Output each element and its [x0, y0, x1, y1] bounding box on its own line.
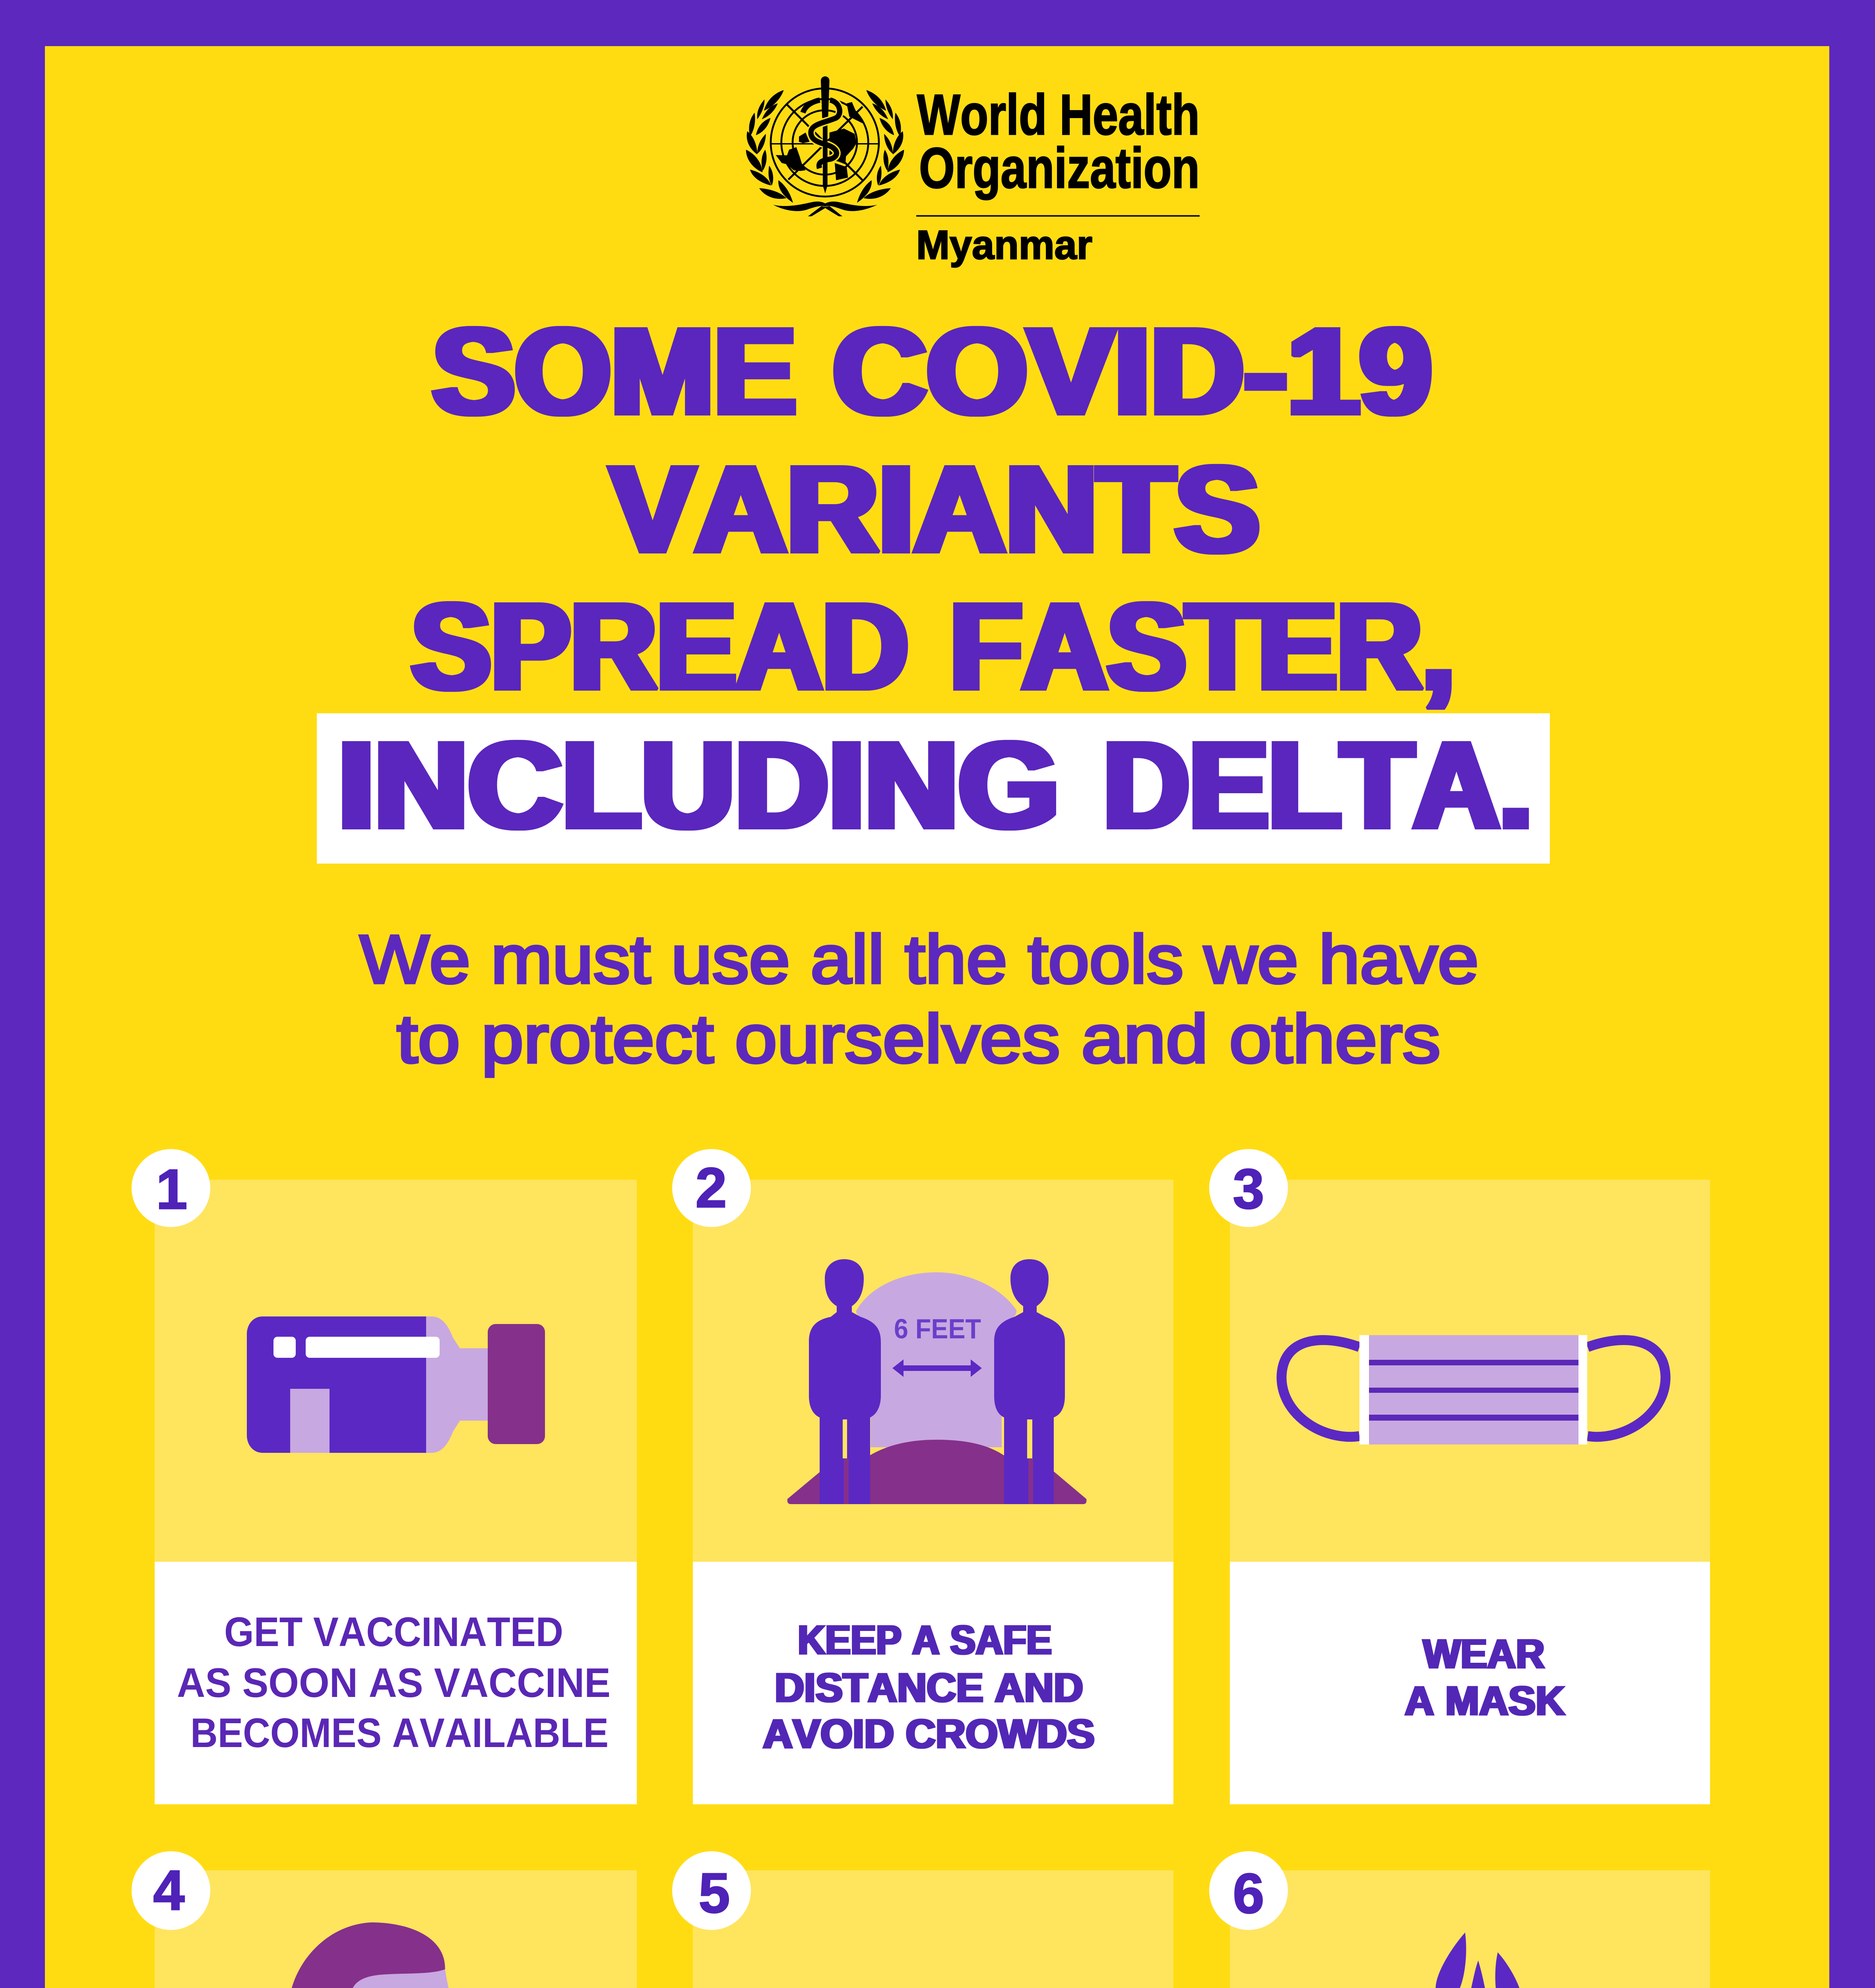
- icon: WHO emblem: [746, 76, 904, 216]
- subtitle: [360, 921, 1479, 1077]
- logo country name: Myanmar: [916, 222, 1092, 268]
- number badge 4: 4: [153, 1859, 185, 1922]
- illustration background: [693, 1180, 1173, 1562]
- distance label: 6 FEET: [894, 1313, 981, 1344]
- title line 3: [411, 577, 1455, 715]
- caption 1: [177, 1609, 611, 1756]
- caption background: [1230, 1562, 1710, 1804]
- title line 1: SOME: [432, 302, 796, 440]
- panel 4: cough or sneeze into elbow: [132, 1851, 637, 1988]
- logo rule: [916, 215, 1200, 217]
- caption background: [693, 1562, 1173, 1804]
- logo: World Health Organization Myanmar: [746, 76, 1200, 268]
- panel 3: wear a mask: [1209, 1149, 1710, 1804]
- number badge 3: [1209, 1149, 1288, 1227]
- caption 2: AVOID CROWDS: [763, 1711, 1095, 1757]
- panel 2: keep a safe distance: [672, 1149, 1173, 1804]
- number badge 5: [672, 1851, 751, 1930]
- number badge 6: 6: [1233, 1862, 1264, 1925]
- number badge 5: 5: [699, 1862, 730, 1925]
- title line 4: INCLUDING: [338, 716, 1059, 854]
- double arrow: [892, 1359, 982, 1377]
- illustration background: [155, 1180, 637, 1562]
- caption 1: BECOMES AVAILABLE: [190, 1710, 609, 1756]
- title line 4: DELTA.: [1103, 716, 1532, 854]
- caption 3: [1405, 1631, 1565, 1724]
- icon: two people six feet apart: [787, 1259, 1086, 1504]
- title line 1: COVID-19: [833, 302, 1432, 440]
- caption 3: WEAR: [1423, 1631, 1545, 1677]
- caption 2: DISTANCE AND: [775, 1665, 1083, 1710]
- title line 3: FASTER,: [950, 577, 1455, 715]
- panel 6: clean your hands: [1209, 1851, 1710, 1988]
- caption 2: KEEP A SAFE: [798, 1617, 1052, 1663]
- title: [317, 302, 1550, 864]
- caption 1: GET VACCINATED: [224, 1609, 563, 1655]
- icon: vaccine vial: [247, 1316, 545, 1453]
- icon: face mask: [1282, 1335, 1666, 1444]
- title line 1: [432, 302, 1432, 440]
- highlight box behind title line 4: [317, 713, 1550, 864]
- icon: washing hands: [1310, 1932, 1586, 1988]
- logo wordmark line 1: World Health: [917, 83, 1200, 147]
- illustration background: [1230, 1870, 1710, 1988]
- panel 5: open windows: [672, 1851, 1173, 1988]
- title line 2: VARIANTS: [610, 440, 1260, 578]
- subtitle line 2: to protect ourselves and others: [397, 1001, 1441, 1077]
- number badge 2: 2: [696, 1156, 727, 1219]
- number badge 2: [672, 1149, 751, 1227]
- number badge 1: [132, 1149, 210, 1227]
- caption background: [155, 1562, 637, 1804]
- icon: person sneezing into elbow: [242, 1922, 547, 1988]
- caption 2: [763, 1617, 1095, 1757]
- illustration background: [1230, 1180, 1710, 1562]
- number badge 6: [1209, 1851, 1288, 1930]
- illustration background: [693, 1870, 1173, 1988]
- title line 4: [338, 716, 1532, 854]
- panel 1: get vaccinated: [132, 1149, 637, 1804]
- logo wordmark line 2: Organization: [919, 136, 1200, 200]
- illustration background: [155, 1870, 637, 1988]
- number badge 4: [132, 1851, 210, 1930]
- number badge 3: 3: [1233, 1157, 1264, 1221]
- subtitle line 1: We must use all the tools we have: [360, 921, 1479, 998]
- title line 3: SPREAD: [411, 577, 908, 715]
- caption 3: A MASK: [1405, 1678, 1565, 1724]
- caption 1: AS SOON AS VACCINE: [177, 1660, 611, 1706]
- number badge 1: 1: [156, 1158, 187, 1221]
